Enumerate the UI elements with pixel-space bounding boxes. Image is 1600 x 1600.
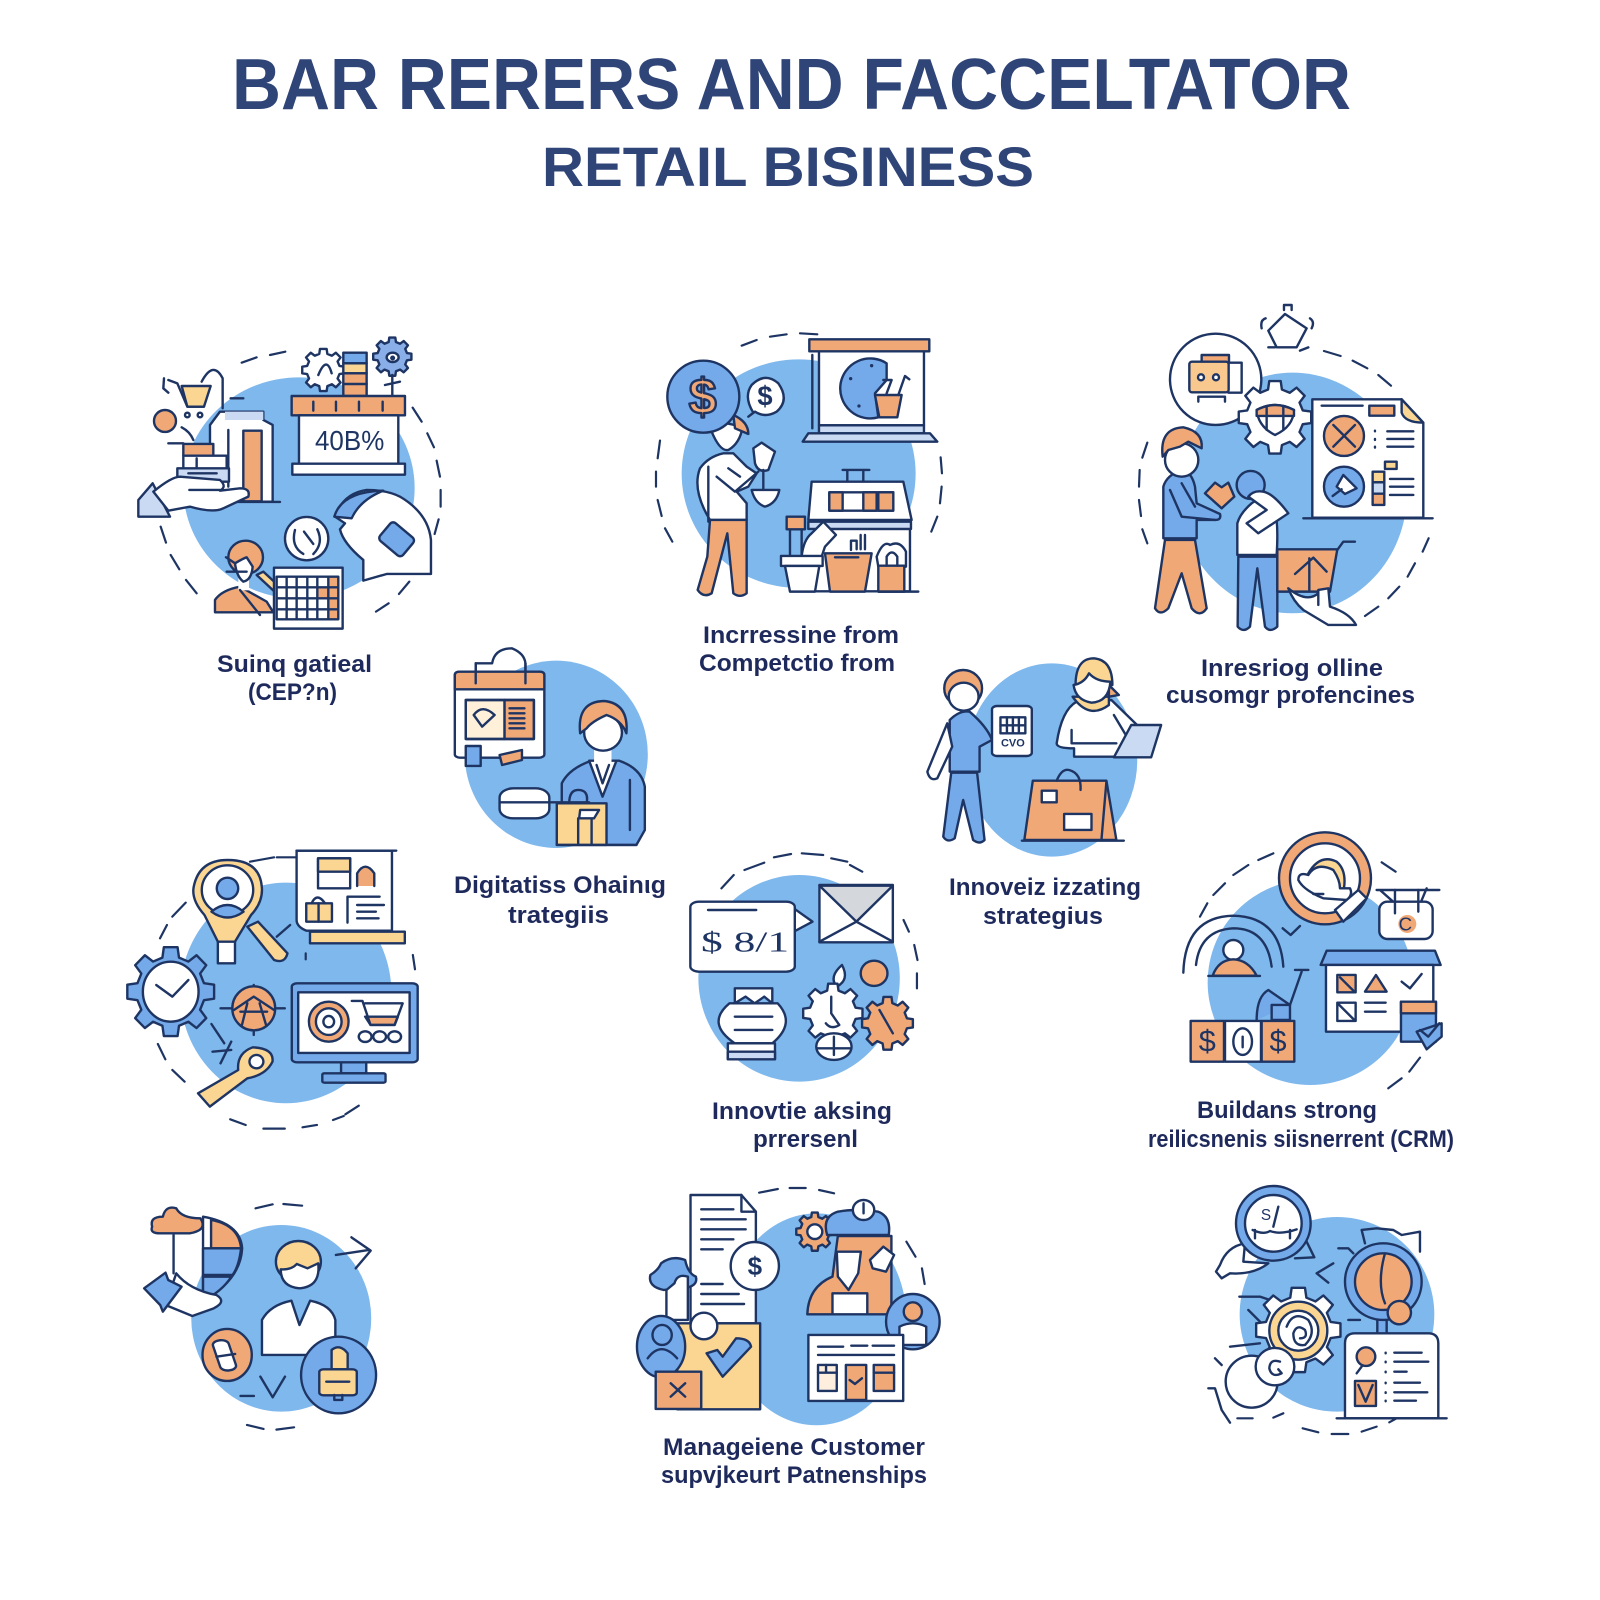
label: innovation strategies: Innoveiz izzating	[949, 874, 1141, 901]
icon: calendar grid	[274, 568, 343, 629]
icon group: person and security	[144, 1204, 376, 1430]
icon: computer monitor	[292, 983, 418, 1083]
icon: user badge	[637, 1316, 685, 1377]
icon: dollar circle	[731, 1242, 779, 1290]
blue circle	[465, 661, 648, 848]
label: increasing competition: Incrressine from	[703, 622, 899, 649]
icon: person	[262, 1241, 335, 1355]
icon: dollar coin	[667, 361, 739, 433]
icon: white gear	[803, 965, 862, 1060]
dashed ring	[247, 1204, 302, 1430]
label: innovative marketing: Innovtie aksing	[712, 1098, 892, 1125]
label: online customer preferences	[1166, 655, 1415, 709]
label: digital channel strategies	[454, 872, 666, 929]
icon: hand with magnifier	[1216, 1186, 1314, 1278]
icon: storefront	[808, 1335, 903, 1401]
icon: dollar bubble	[748, 378, 784, 417]
icon group: competition	[656, 333, 942, 596]
icon: second person	[1237, 471, 1288, 630]
icon: large gear	[1239, 1288, 1340, 1372]
label: increasing competition: Competctio from	[699, 650, 895, 677]
icon: shopping cart	[154, 370, 243, 440]
orange dot	[861, 961, 887, 986]
icon: dollar coin: $	[689, 369, 717, 425]
blue circle	[191, 1225, 371, 1412]
icon: crown stack	[719, 988, 786, 1059]
icon: checklist store	[1321, 951, 1441, 1032]
icon group: partnerships	[637, 1188, 940, 1425]
label: pricing and stock	[217, 651, 372, 706]
icon: check mark	[241, 1377, 285, 1397]
label: online customer preferences: cusomgr profencines	[1166, 682, 1415, 709]
panel: online customer preferences	[1139, 305, 1433, 709]
tablet text: CVO	[1001, 738, 1025, 750]
icon: dollar circle: $	[748, 1251, 763, 1281]
icon: money blocks	[1191, 1021, 1294, 1062]
blue circle	[1208, 880, 1413, 1085]
label: innovative marketing	[712, 1098, 892, 1153]
arrow	[1317, 1263, 1333, 1283]
price text: $ 8/1	[701, 928, 789, 959]
panel: pricing and stock	[138, 338, 441, 706]
dashed ring	[161, 352, 441, 612]
percentage value: 40B%	[315, 425, 384, 456]
panel: person and security	[144, 1204, 376, 1430]
icon: orange lens	[1338, 1228, 1422, 1335]
icon: gear with shield	[1239, 381, 1311, 454]
icon: chair arm	[1257, 970, 1308, 1020]
panel: search and settings	[127, 851, 418, 1129]
icon: globe segments	[203, 1217, 242, 1301]
label: CRM: Buildans strong	[1197, 1097, 1377, 1124]
label: CRM	[1148, 1097, 1454, 1153]
icon: speech bubble with phone	[334, 490, 431, 581]
icon: plant pot	[781, 517, 836, 592]
icon: cart and hand	[1277, 542, 1356, 625]
icon: envelope	[819, 885, 893, 942]
icon: briefcase circle	[1170, 334, 1261, 425]
dashed ring	[1200, 853, 1420, 1088]
panel: analysis and process	[1208, 1186, 1447, 1434]
label: managing partnerships: Manageiene Customer	[663, 1434, 925, 1461]
label: pricing and stock: Suinq gatieal	[217, 651, 372, 678]
icon: first person	[1155, 427, 1234, 613]
label: CRM: reilicsnenis siisnerrent (CRM)	[1148, 1126, 1454, 1153]
icon: shop	[808, 470, 912, 591]
icon: dollar bubble: $	[757, 380, 773, 411]
icon: pill badge	[202, 1329, 252, 1381]
icon: hanging tag	[1377, 888, 1439, 939]
dashed ring	[656, 333, 942, 542]
icon: salesperson	[562, 701, 645, 845]
icon: calendar board	[455, 648, 544, 766]
icon group: pricing and stock	[138, 338, 441, 629]
icon: hexagon	[1261, 305, 1313, 351]
icon group: CRM	[1183, 832, 1442, 1088]
icon: building	[210, 412, 280, 502]
icon group: online customers	[1139, 305, 1433, 630]
icon: money blocks: $	[1269, 1025, 1287, 1059]
icon: key	[198, 1024, 273, 1107]
blue circle	[180, 883, 391, 1103]
icon: hand and arrow	[144, 1235, 221, 1316]
icon: orange ring with cloud	[1279, 832, 1371, 935]
icon: stacked goods	[168, 443, 229, 482]
icon: user badge right	[886, 1294, 940, 1349]
icon: report document	[1303, 399, 1433, 518]
icon: person	[215, 541, 287, 615]
label: digital channel strategies: Digitatiss Ohainιg	[454, 872, 666, 899]
icon: open hand	[138, 477, 249, 517]
icon: woman with laptop	[1057, 658, 1161, 757]
label: innovation strategies	[949, 874, 1141, 930]
icon: folder with check	[677, 1313, 760, 1409]
dashed ring	[721, 853, 917, 988]
label: innovation strategies: strategius	[983, 903, 1103, 930]
icon: bucket and bag	[825, 535, 918, 592]
label: digital channel strategies: trategiis	[508, 902, 609, 929]
arrow	[336, 1237, 371, 1268]
icon: worker	[807, 1236, 894, 1314]
icon: document	[691, 1195, 756, 1323]
icon: clock board	[803, 339, 937, 442]
icon: orange gear	[862, 997, 913, 1050]
icon: money blocks: $	[1199, 1025, 1216, 1059]
panel: increasing competition	[656, 333, 942, 677]
label: pricing and stock: (CEP?n)	[248, 679, 337, 706]
icon group: innovative marketing	[690, 853, 917, 1082]
label: innovative marketing: prrersenl	[753, 1126, 858, 1153]
icon: blue flower gear	[373, 338, 411, 395]
icon: person with scale	[697, 415, 779, 596]
icon: product board	[297, 851, 405, 943]
panel: innovation strategies	[927, 658, 1161, 930]
icon: cloud with clock	[826, 1200, 889, 1235]
price board	[292, 396, 405, 475]
icon: checklist card	[1337, 1333, 1447, 1418]
icon: orange bag	[1022, 770, 1124, 841]
icon: price bubble	[690, 902, 812, 972]
subheading: RETAIL BISINESS	[542, 135, 1034, 198]
icon: gear and column	[302, 349, 367, 396]
blue circle	[183, 377, 415, 599]
label: online customer preferences: Inresriog olline	[1201, 655, 1383, 682]
main heading: BAR RERERS AND FACCELTATOR	[232, 45, 1351, 125]
icon group: analysis and process	[1208, 1186, 1447, 1434]
icon group: innovating	[927, 658, 1161, 857]
icon: clock gear	[127, 947, 214, 1036]
icon: man with tablet	[927, 670, 1032, 842]
blue circle	[1240, 1217, 1434, 1412]
blue circle	[966, 663, 1137, 857]
icon: cross box	[656, 1372, 701, 1409]
label: managing partnerships	[661, 1434, 927, 1489]
blue circle	[1178, 373, 1407, 613]
panel: managing supplier partnerships	[637, 1188, 940, 1489]
icon: cloud and stem	[650, 1258, 696, 1320]
icon: clock	[285, 517, 328, 560]
blue circle	[698, 875, 900, 1082]
dashed ring	[158, 857, 415, 1129]
icon: magnifier with user	[193, 860, 290, 963]
icon: orange gear	[796, 1213, 833, 1251]
icon: pill tag	[500, 788, 589, 818]
icon: orange burst	[221, 985, 285, 1035]
icon: hand with magnifier: S	[1261, 1207, 1271, 1224]
icon group: digital channel	[455, 648, 648, 848]
icon: hanging tag: C	[1399, 914, 1412, 935]
panel: innovative marketing	[690, 853, 917, 1153]
icon: orange cloud	[152, 1208, 203, 1233]
dashed ring	[1139, 351, 1429, 616]
panel: customer relationship management	[1148, 832, 1454, 1153]
label: increasing competition	[699, 622, 899, 677]
label: managing partnerships: supvjkeurt Patnenships	[661, 1462, 927, 1489]
icon group: search and settings	[127, 851, 418, 1129]
panel: digital channel strategies	[454, 648, 666, 929]
icon: signal arcs with person	[1183, 916, 1283, 976]
icon: folder with shield	[1401, 1002, 1442, 1049]
dashed ring	[759, 1188, 925, 1284]
icon: shopping bag	[557, 790, 636, 845]
title	[232, 45, 1351, 198]
blue circle	[726, 1213, 906, 1425]
dashed ring	[1237, 1413, 1397, 1434]
icon: lock badge	[301, 1337, 376, 1413]
blue circle	[682, 359, 916, 588]
icon: small gears	[1208, 1343, 1294, 1423]
